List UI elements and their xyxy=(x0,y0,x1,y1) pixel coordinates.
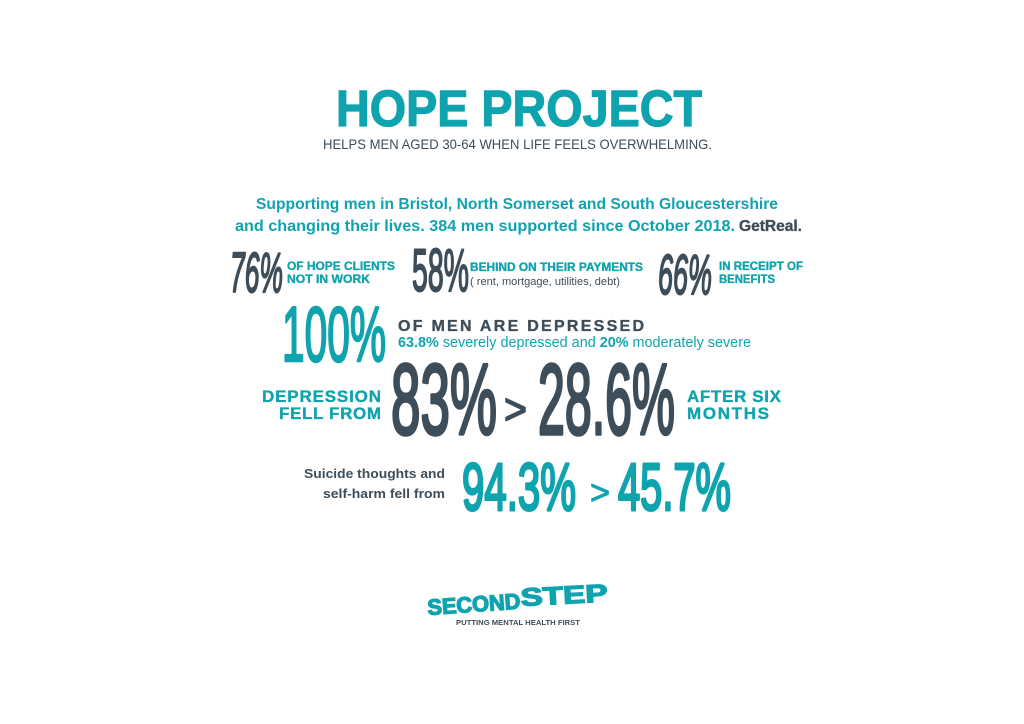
stat: 100% of men are depressed: OF MEN ARE DEPRESSED xyxy=(398,318,644,335)
stat: 66% in receipt of benefits: BENEFITS xyxy=(719,274,775,286)
stat: 58% behind on payments: BEHIND ON THEIR PAYMENTS xyxy=(470,262,643,274)
stat: suicide thoughts fell: > xyxy=(590,474,610,512)
stat: 58% behind on payments: ( rent, mortgage, utilities, debt) xyxy=(470,276,620,288)
stat: 76% not in work: 76% xyxy=(230,241,283,305)
logo: Second Step: SECOND xyxy=(427,589,521,620)
stat: suicide thoughts fell: Suicide thoughts and xyxy=(304,466,445,481)
logo: Second Step: STEP xyxy=(520,579,608,612)
stat: suicide thoughts fell xyxy=(304,450,731,525)
stat: depression fell xyxy=(262,344,782,456)
stat: depression fell: AFTER SIX xyxy=(687,387,782,406)
stat: 100% of men are depressed: 63.8% severely depressed and 20% moderately severe xyxy=(398,335,751,351)
stat: depression fell: 83% xyxy=(391,344,497,456)
logo: Second Step: PUTTING MENTAL HEALTH FIRST xyxy=(456,620,581,627)
stat: 100% of men are depressed xyxy=(282,290,751,378)
stat: depression fell: FELL FROM xyxy=(279,404,381,423)
stat: 100% of men are depressed: 100% xyxy=(282,290,386,378)
stat: depression fell: > xyxy=(504,385,527,434)
intro paragraph: GetReal. xyxy=(739,218,802,235)
stat: depression fell: 28.6% xyxy=(538,344,675,456)
stat: 66% in receipt of benefits: IN RECEIPT OF xyxy=(719,261,803,273)
stat: depression fell: MONTHS xyxy=(687,404,769,423)
subtitle: HELPS MEN AGED 30-64 WHEN LIFE FEELS OVERWHELMING. xyxy=(323,136,712,152)
intro paragraph xyxy=(235,196,802,235)
stat: depression fell: DEPRESSION xyxy=(262,387,381,406)
stat: 76% not in work: NOT IN WORK xyxy=(287,274,371,286)
title: HOPE PROJECT xyxy=(336,80,702,137)
stat: suicide thoughts fell: 94.3% xyxy=(462,450,576,525)
stat: 76% not in work: OF HOPE CLIENTS xyxy=(287,261,395,273)
stat: suicide thoughts fell: self-harm fell from xyxy=(323,486,445,501)
intro paragraph: and changing their lives. 384 men supported since October 2018. xyxy=(235,218,735,235)
stat: 76% not in work xyxy=(230,241,395,305)
stat: 66% in receipt of benefits: 66% xyxy=(658,243,712,307)
stat: 58% behind on payments xyxy=(412,237,643,304)
stat: suicide thoughts fell: 45.7% xyxy=(618,450,731,525)
stat: 58% behind on payments: 58% xyxy=(412,237,469,304)
intro paragraph: Supporting men in Bristol, North Somerset and South Gloucestershire xyxy=(256,196,778,213)
logo: Second Step xyxy=(427,579,608,627)
